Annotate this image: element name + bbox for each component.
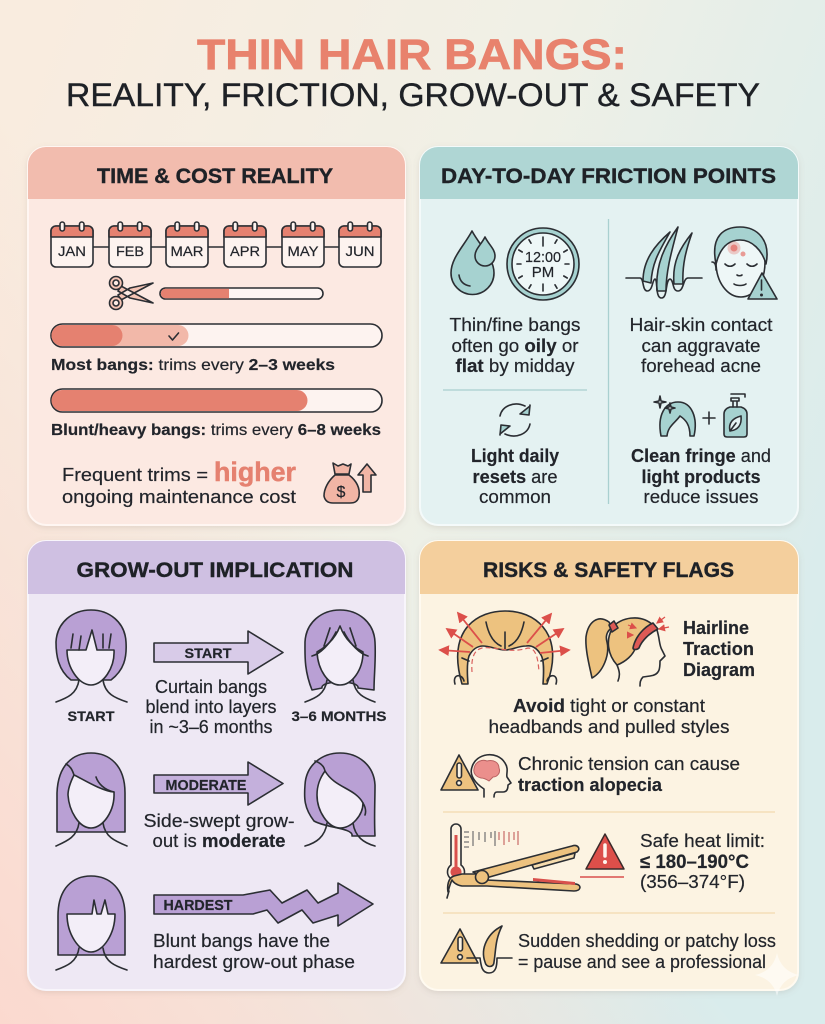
- arrow: start: START: [184, 645, 232, 661]
- icon: money bag: [324, 463, 376, 503]
- heading: risks: RISKS & SAFETY FLAGS: [483, 558, 734, 582]
- icon: thermometer scale: [448, 824, 518, 880]
- calendar timeline: MAY: [288, 243, 319, 259]
- text: avoid: Avoid tight or constant: [513, 695, 705, 716]
- icon: heat warning: [580, 834, 624, 877]
- text: curtain bangs: in ~3–6 months: [150, 717, 272, 737]
- panel: risks and safety: [420, 541, 798, 990]
- text: clean fringe: [631, 445, 771, 507]
- head: side-swept start: [56, 753, 127, 846]
- text: avoid: [488, 695, 730, 737]
- text: curtain bangs: [146, 677, 276, 737]
- calendar timeline: APR: [230, 243, 260, 259]
- text: traction alopecia: traction alopecia: [518, 774, 663, 795]
- text: oily by midday: [450, 314, 580, 376]
- icon: hair follicles: [626, 227, 702, 298]
- calendar timeline: JAN: [58, 243, 86, 259]
- label: 3-6 months: 3–6 MONTHS: [292, 708, 386, 724]
- text: curtain bangs: Curtain bangs: [155, 677, 267, 697]
- calendar timeline: MAR: [170, 243, 204, 259]
- panel: day-to-day friction points: [420, 147, 798, 525]
- text: side-swept: [144, 811, 294, 851]
- watermark sparkle: [755, 953, 799, 996]
- heading: grow-out: GROW-OUT IMPLICATION: [76, 558, 354, 582]
- icon: warning and follicle: [441, 926, 512, 973]
- text: hairline traction diagram: [683, 617, 755, 680]
- panel: time and cost reality: [28, 147, 405, 525]
- calendar timeline: JUN: [346, 243, 374, 259]
- text: curtain bangs: blend into layers: [146, 697, 276, 717]
- callout: cost: [62, 457, 296, 507]
- text: safe heat limit: [640, 830, 765, 892]
- icon: face with acne and warning: [712, 227, 777, 299]
- arrow: hardest zigzag: HARDEST: [164, 898, 233, 914]
- icon: reset arrows: [500, 404, 530, 436]
- text: safe heat limit: Safe heat limit:: [640, 830, 765, 851]
- bar: most bangs: [51, 324, 382, 347]
- icon: money bag: $: [337, 484, 346, 501]
- text: hair-skin contact: Hair-skin contact: [630, 314, 772, 335]
- calendar timeline: FEB: [116, 243, 144, 259]
- callout: cost: higher: [214, 457, 296, 487]
- arrow: start: [154, 631, 283, 674]
- text: hardest grow-out: hardest grow-out phase: [153, 952, 355, 972]
- text: see a professional: = pause and see a professional: [518, 951, 766, 972]
- text: oily by midday: flat by midday: [456, 355, 575, 376]
- text: blunt bangs: Blunt bangs have the: [153, 931, 330, 951]
- text: clean fringe: Clean fringe and: [631, 445, 771, 466]
- diagram: ponytail traction: [586, 617, 669, 686]
- arrow: hardest zigzag: [154, 883, 373, 926]
- text: hairline traction diagram: Hairline: [683, 617, 749, 638]
- label: blunt bangs: Blunt/heavy bangs: trims every 6–8 weeks: [51, 422, 381, 439]
- text: light daily resets: common: [479, 486, 551, 507]
- icon: flat iron: [447, 846, 580, 898]
- icon: clock: 12:00: [525, 249, 561, 266]
- title: REALITY, FRICTION, GROW-OUT & SAFETY: [66, 77, 760, 113]
- text: clean fringe: light products: [642, 466, 760, 487]
- text: avoid: headbands and pulled styles: [488, 716, 730, 737]
- text: light daily resets: resets are: [472, 466, 558, 487]
- icon: clock: [507, 228, 579, 300]
- title: THIN HAIR BANGS:: [197, 31, 627, 79]
- arrow: moderate: MODERATE: [166, 778, 247, 794]
- text: side-swept: out is moderate: [152, 831, 286, 851]
- label: most bangs: Most bangs: trims every 2–3 weeks: [51, 357, 335, 374]
- text: oily by midday: Thin/fine bangs: [450, 314, 580, 335]
- icon: oil drops: [451, 231, 495, 294]
- text: hair-skin contact: can aggravate: [642, 335, 760, 356]
- text: chronic tension: Chronic tension can cause: [518, 753, 740, 774]
- text: clean fringe: reduce issues: [644, 486, 758, 507]
- text: safe heat limit: ≤ 180–190°C: [640, 852, 749, 873]
- callout: cost: Frequent trims =: [62, 464, 208, 485]
- text: sudden shedding: Sudden shedding or patchy loss: [518, 930, 776, 951]
- calendar timeline: [51, 222, 381, 267]
- icon: warning and brain: [441, 755, 511, 797]
- text: light daily resets: [471, 445, 560, 507]
- text: hairline traction diagram: Traction: [683, 638, 754, 659]
- icon: scissors: [110, 276, 153, 310]
- head: side-swept grown: [305, 753, 375, 846]
- diagram: hairline tension: [440, 611, 569, 684]
- bar: blunt bangs: [51, 389, 382, 412]
- icon: clock: PM: [532, 264, 554, 281]
- label: start: START: [68, 708, 115, 724]
- text: hair-skin contact: [630, 314, 772, 376]
- heading: friction points: DAY-TO-DAY FRICTION POINTS: [441, 164, 776, 188]
- panel: grow-out implication: [28, 541, 405, 990]
- head: curtain start: [56, 610, 127, 702]
- text: hairline traction diagram: Diagram: [683, 659, 755, 680]
- title: [66, 31, 760, 113]
- callout: cost: ongoing maintenance cost: [62, 486, 296, 507]
- icon: clean fringe and bottle: [654, 394, 747, 437]
- arrow: moderate: [154, 762, 283, 805]
- text: side-swept: Side-swept grow-: [144, 811, 294, 831]
- text: light daily resets: Light daily: [471, 445, 560, 466]
- head: blunt start: [56, 876, 127, 970]
- text: hair-skin contact: forehead acne: [641, 355, 761, 376]
- heading: time and cost reality: TIME & COST REALITY: [97, 164, 333, 188]
- head: curtain grown: [305, 610, 375, 702]
- small progress bar: [160, 288, 323, 299]
- text: safe heat limit: (356–374°F): [640, 871, 745, 892]
- text: oily by midday: often go oily or: [452, 335, 578, 356]
